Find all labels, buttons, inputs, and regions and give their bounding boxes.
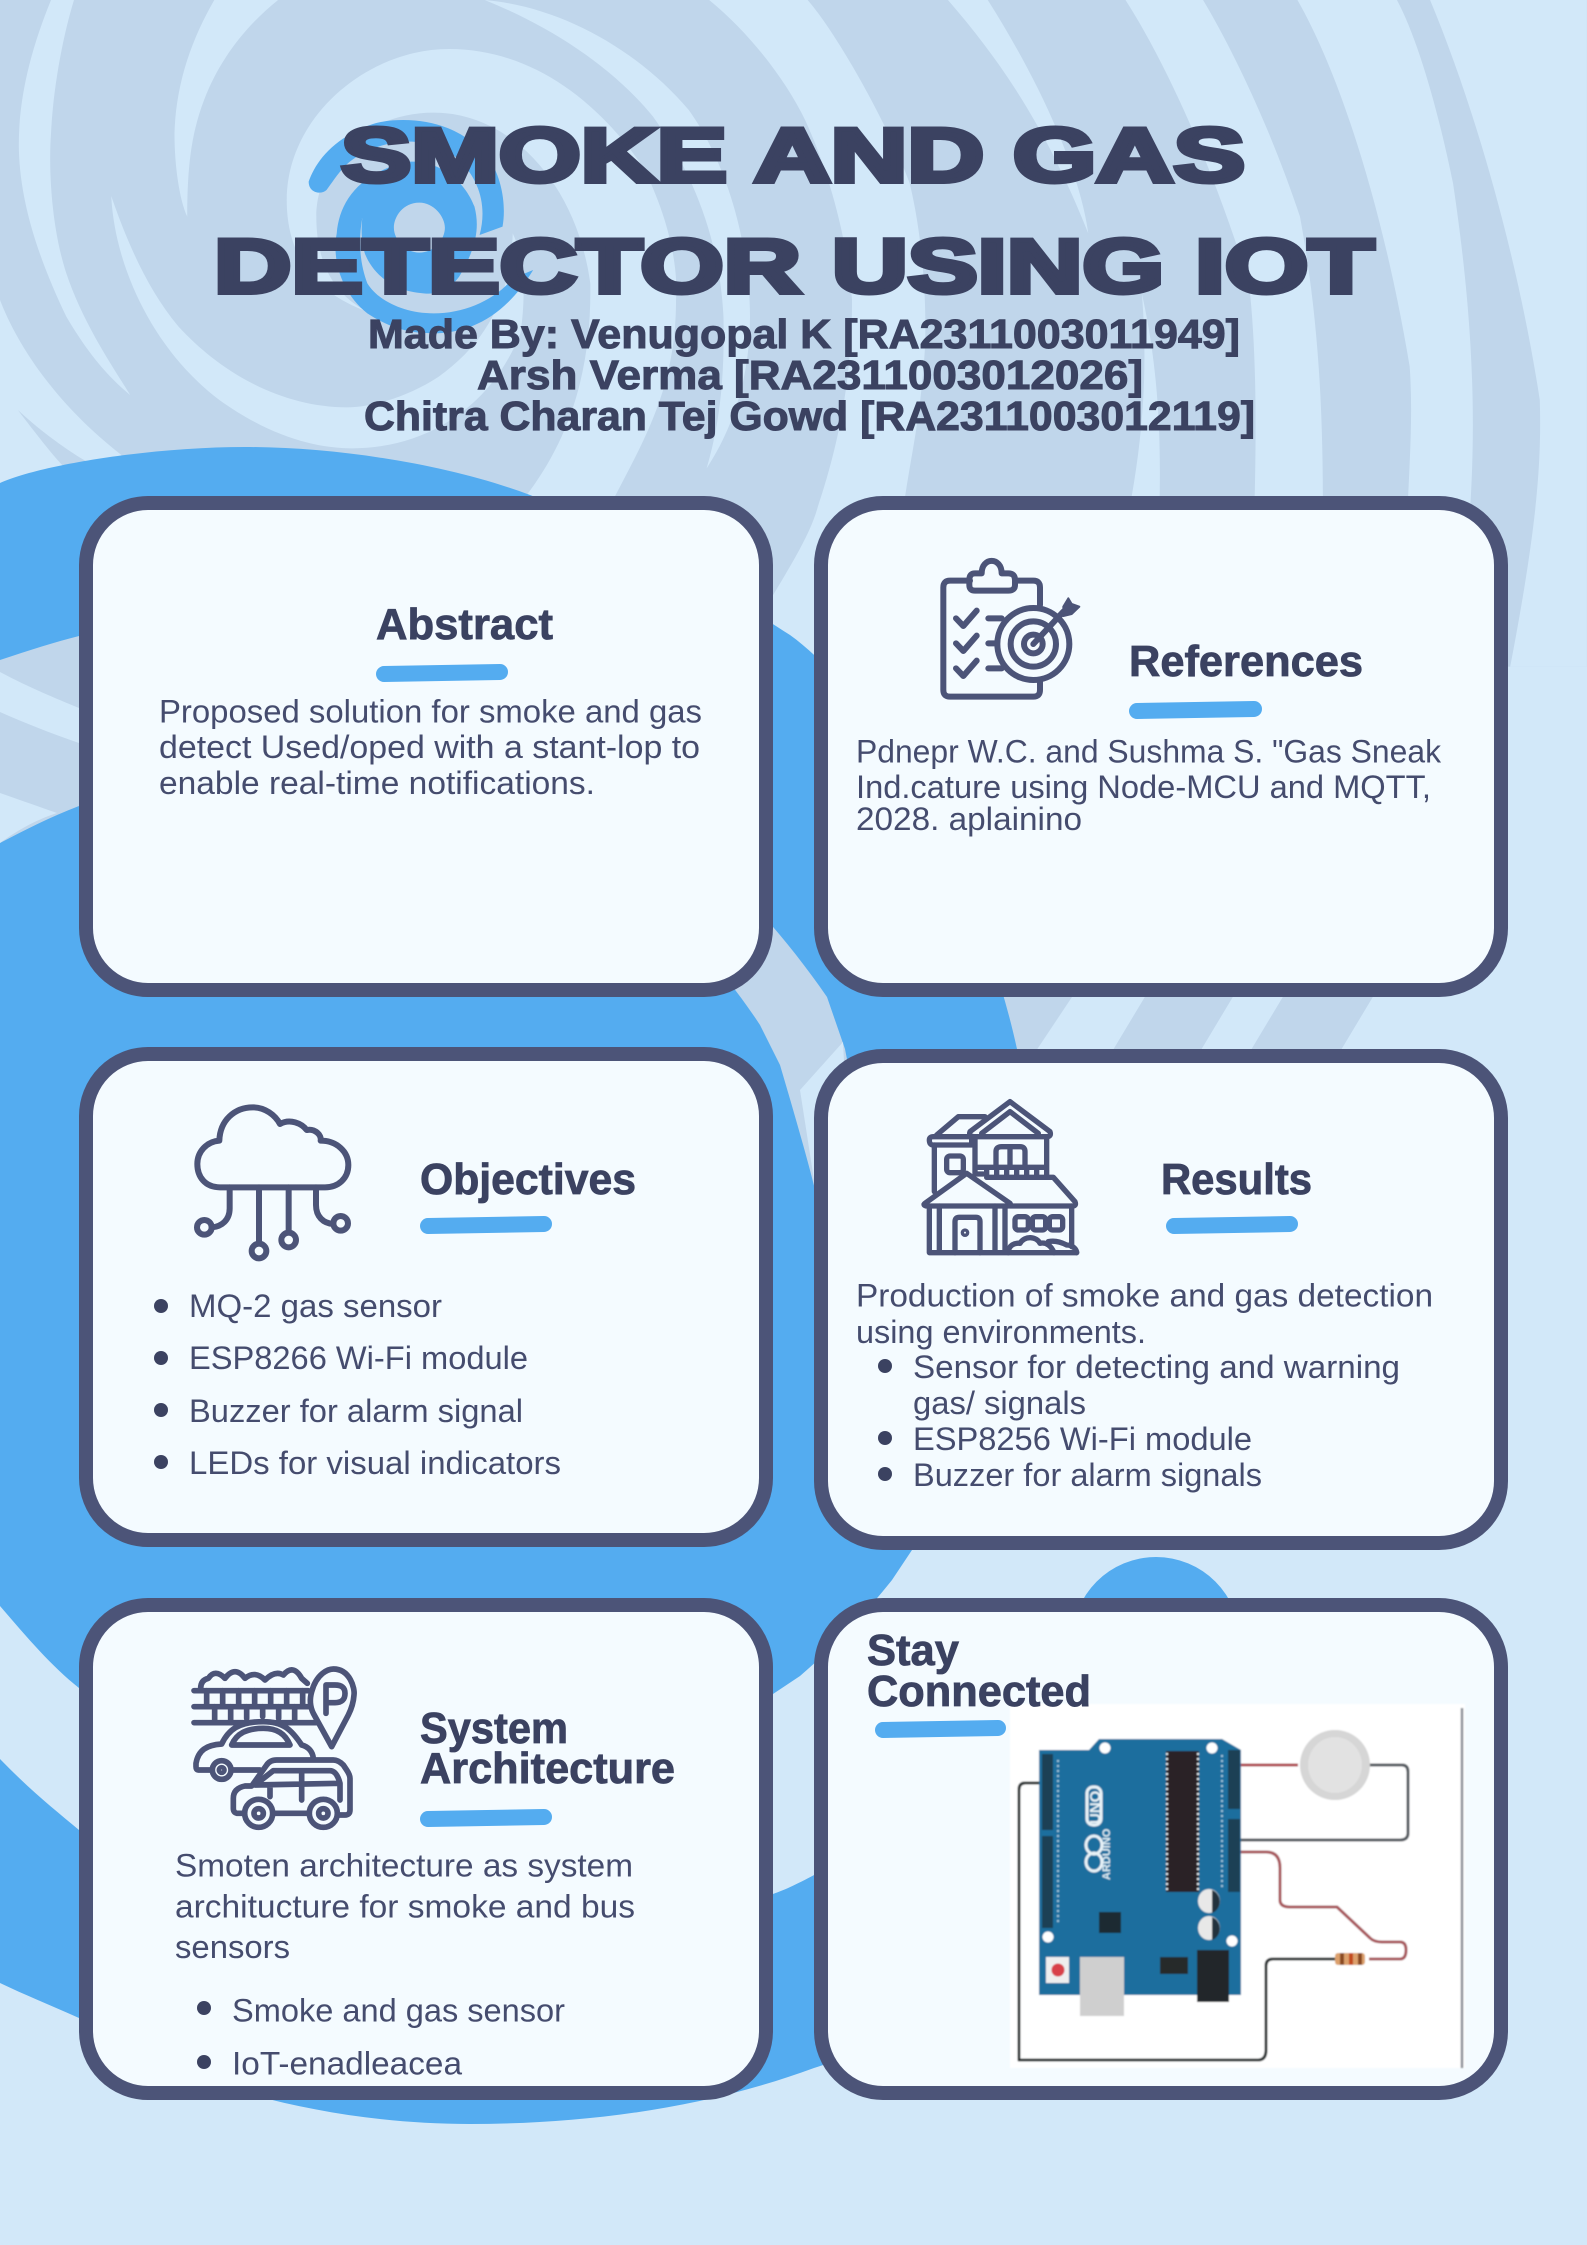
panel: abstract bbox=[86, 503, 766, 990]
heading: system architecture: System bbox=[420, 1704, 568, 1753]
underline: stay connected bbox=[883, 1728, 998, 1730]
underline: abstract bbox=[384, 672, 500, 674]
text: abstract: enable real-time notifications. bbox=[159, 765, 595, 801]
heading: results: Results bbox=[1161, 1155, 1312, 1204]
heading: stay connected: Connected bbox=[867, 1667, 1091, 1716]
list: objectives: MQ-2 gas sensor bbox=[189, 1288, 442, 1324]
authors: Made By: Venugopal K [RA2311003011949] bbox=[368, 311, 1240, 357]
underline: system architecture bbox=[428, 1817, 544, 1819]
wiring bbox=[1019, 1765, 1408, 2060]
heading: stay connected: Stay bbox=[867, 1626, 960, 1675]
text: references bbox=[856, 734, 1442, 837]
text: results: ESP8256 Wi-Fi module bbox=[913, 1421, 1252, 1457]
text: references: 2028. aplainino bbox=[856, 801, 1082, 837]
heading: objectives: Objectives bbox=[420, 1155, 636, 1204]
text: system architecture: architucture for smoke and bus bbox=[175, 1888, 635, 1924]
title bbox=[214, 114, 1374, 310]
icon: cars and parking bbox=[194, 1669, 354, 1827]
title: USING bbox=[832, 224, 1164, 310]
text: references: Ind.cature using Node-MCU and MQTT, bbox=[856, 769, 1431, 805]
title: DETECTOR bbox=[214, 224, 801, 310]
panel: references bbox=[821, 503, 1501, 990]
heading: system architecture bbox=[420, 1704, 675, 1793]
underline: results bbox=[1174, 1224, 1290, 1226]
text: abstract bbox=[159, 694, 702, 801]
title: GAS bbox=[1013, 114, 1245, 198]
underline: objectives bbox=[428, 1224, 544, 1226]
circuit diagram bbox=[1010, 1704, 1465, 2068]
swirl centre behind title bbox=[309, 120, 533, 333]
heading: abstract: Abstract bbox=[376, 600, 553, 649]
icon: houses bbox=[924, 1102, 1077, 1253]
bright blue swirl bbox=[0, 447, 1240, 2124]
arduino board bbox=[1039, 1739, 1241, 2016]
panel: results bbox=[821, 1056, 1501, 1543]
text: abstract: Proposed solution for smoke and gas bbox=[159, 694, 702, 730]
underline: references bbox=[1137, 709, 1254, 711]
title: IOT bbox=[1195, 224, 1374, 310]
resistor bbox=[1335, 1953, 1365, 1965]
text: results: gas/ signals bbox=[913, 1385, 1086, 1421]
pale swirl pattern bbox=[0, 0, 1587, 667]
panel: objectives bbox=[86, 1054, 766, 1540]
title: AND bbox=[754, 114, 984, 198]
sensor disc bbox=[1300, 1730, 1370, 1800]
list: objectives: ESP8266 Wi-Fi module bbox=[189, 1340, 528, 1376]
panel: stay connected bbox=[821, 1605, 1501, 2093]
authors: Arsh Verma [RA2311003012026] bbox=[477, 352, 1143, 398]
text: system architecture bbox=[175, 1848, 635, 2082]
arduino board: UNO bbox=[1087, 1790, 1104, 1824]
text: results: Production of smoke and gas detection bbox=[856, 1278, 1433, 1314]
text: system architecture: sensors bbox=[175, 1929, 290, 1965]
panel: system architecture bbox=[86, 1605, 766, 2093]
text: system architecture: IoT-enadleacea bbox=[232, 2046, 462, 2082]
authors bbox=[364, 311, 1255, 439]
text: results: Buzzer for alarm signals bbox=[913, 1457, 1262, 1493]
list: objectives: LEDs for visual indicators bbox=[189, 1445, 561, 1481]
heading: references: References bbox=[1129, 637, 1363, 686]
text: results: using environments. bbox=[856, 1314, 1146, 1350]
heading: stay connected bbox=[867, 1626, 1091, 1716]
text: references: Pdnepr W.C. and Sushma S. "Gas Sneak bbox=[856, 734, 1442, 770]
list: objectives: Buzzer for alarm signal bbox=[189, 1393, 523, 1429]
text: system architecture: Smoten architecture as system bbox=[175, 1848, 633, 1884]
diagonal stripes between panels bbox=[1000, 985, 1380, 1060]
text: system architecture: Smoke and gas sensor bbox=[232, 1992, 565, 2028]
icon: clipboard with target bbox=[943, 561, 1079, 697]
heading: system architecture: Architecture bbox=[420, 1744, 675, 1793]
title: SMOKE bbox=[341, 114, 727, 198]
text: results: Sensor for detecting and warning bbox=[913, 1349, 1400, 1385]
text: abstract: detect Used/oped with a stant-lop to bbox=[159, 729, 700, 765]
list: objectives bbox=[154, 1288, 561, 1481]
icon: cloud network bbox=[197, 1107, 348, 1258]
arduino board: ARDUINO bbox=[1101, 1828, 1113, 1880]
text: results bbox=[856, 1278, 1433, 1493]
authors: Chitra Charan Tej Gowd [RA2311003012119] bbox=[364, 393, 1255, 439]
